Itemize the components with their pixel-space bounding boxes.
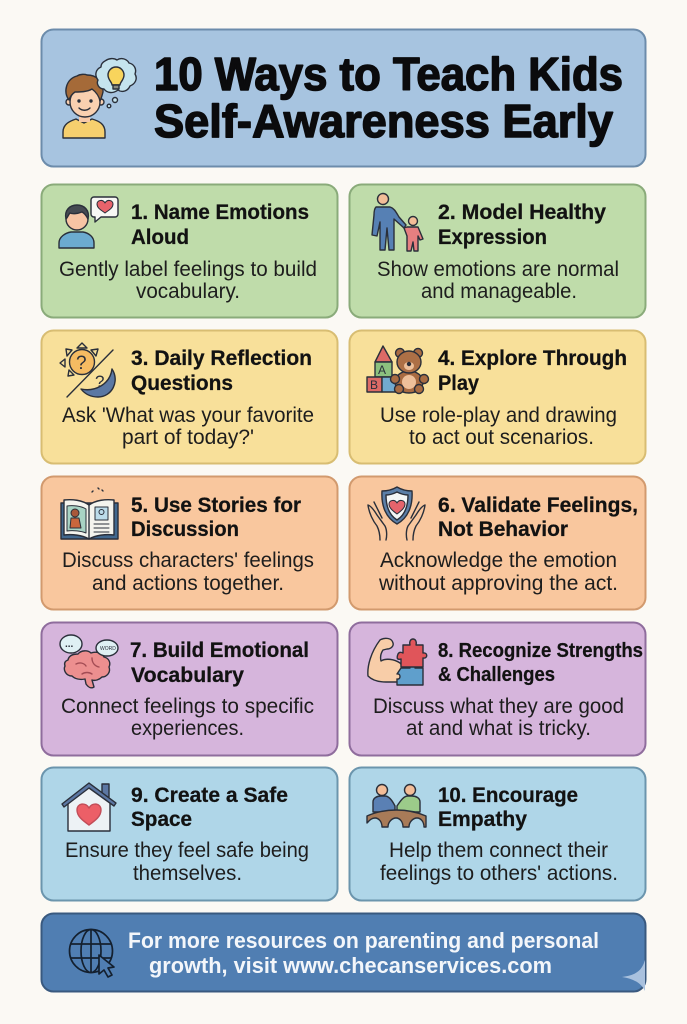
header banner — [42, 30, 646, 166]
heading — [438, 784, 578, 831]
description: without approving the act. — [378, 572, 618, 595]
icon: hands around a heart shield — [368, 487, 425, 540]
heading: Questions — [131, 372, 233, 395]
heading — [131, 784, 288, 831]
heading — [438, 347, 627, 395]
heading: Space — [131, 808, 192, 831]
description — [378, 549, 618, 595]
description: and manageable. — [421, 280, 577, 303]
heading — [438, 640, 643, 686]
heading: 5. Use Stories for — [131, 494, 301, 517]
heading: Play — [438, 372, 479, 395]
description: themselves. — [133, 862, 242, 885]
decorative sparkle — [622, 960, 645, 991]
icon: toy blocks and teddy bear: B — [370, 378, 378, 392]
description — [373, 695, 624, 740]
icon: toy blocks and teddy bear — [367, 346, 428, 394]
heading — [131, 494, 301, 541]
icon: sun and moon with question marks: ? — [76, 353, 87, 374]
footer text — [128, 928, 599, 978]
icon: open story book — [61, 488, 118, 539]
heading: 6. Validate Feelings, — [438, 494, 638, 517]
icon: two people on a bridge — [367, 784, 426, 827]
icon: toy blocks and teddy bear: A — [378, 363, 386, 377]
description: Help them connect their — [389, 839, 608, 862]
description: Gently label feelings to build — [59, 258, 317, 281]
card 3: Daily Reflection Questions — [42, 330, 338, 464]
card 10: Encourage Empathy — [350, 768, 646, 900]
description — [380, 404, 617, 449]
heading — [438, 494, 638, 541]
card 4: Explore Through Play — [350, 330, 646, 464]
heading: 1. Name Emotions — [131, 201, 309, 224]
heading: 4. Explore Through — [438, 347, 627, 370]
description — [61, 695, 314, 740]
description: vocabulary. — [136, 280, 240, 303]
heading — [130, 639, 309, 687]
title — [154, 48, 623, 147]
description — [380, 839, 618, 885]
description: Show emotions are normal — [377, 258, 619, 281]
description: to act out scenarios. — [409, 426, 594, 449]
heading: 7. Build Emotional — [130, 639, 309, 662]
footer banner — [42, 914, 646, 992]
description: Ensure they feel safe being — [65, 839, 309, 862]
heading: 3. Daily Reflection — [131, 347, 312, 370]
icon: sun and moon with question marks — [60, 343, 115, 397]
heading: 8. Recognize Strengths — [438, 640, 643, 662]
description: Acknowledge the emotion — [380, 549, 617, 572]
icon: brain with speech bubbles: ... — [65, 639, 74, 650]
heading: Not Behavior — [438, 518, 568, 541]
heading — [438, 201, 606, 249]
heading: Empathy — [438, 808, 527, 831]
icon: brain with speech bubbles — [60, 635, 118, 688]
icon: child thinking of a light bulb — [63, 59, 136, 138]
heading: Expression — [438, 226, 547, 249]
footer text: For more resources on parenting and personal — [128, 928, 599, 953]
heading: & Challenges — [438, 664, 555, 686]
icon: person with heart speech bubble — [59, 197, 118, 248]
description: at and what is tricky. — [406, 717, 591, 740]
card 8: Recognize Strengths & Challenges — [350, 622, 646, 756]
description — [62, 549, 314, 595]
card 5: Use Stories for Discussion — [42, 476, 338, 610]
icon: sun and moon with question marks: ? — [95, 372, 104, 391]
heading: Discussion — [131, 518, 239, 541]
description — [59, 258, 317, 303]
description: feelings to others' actions. — [380, 862, 618, 885]
description: Connect feelings to specific — [61, 695, 314, 718]
description: Discuss what they are good — [373, 695, 624, 718]
heading — [131, 201, 309, 249]
icon: house with heart — [62, 783, 116, 831]
heading: 9. Create a Safe — [131, 784, 288, 807]
card 7: Build Emotional Vocabulary — [42, 622, 338, 756]
card 1: Name Emotions Aloud — [42, 184, 338, 318]
heading: Aloud — [131, 226, 189, 249]
icon: globe with cursor — [70, 930, 114, 977]
icon: flexed arm with puzzle pieces — [368, 638, 427, 685]
description — [377, 258, 619, 303]
description: Discuss characters' feelings — [62, 549, 314, 572]
heading: Vocabulary — [131, 664, 244, 687]
description — [62, 404, 314, 449]
description: and actions together. — [92, 572, 284, 595]
description — [65, 839, 309, 885]
footer text: growth, visit www.checanservices.com — [149, 953, 552, 978]
icon: brain with speech bubbles: WORD — [100, 646, 116, 652]
card 6: Validate Feelings, Not Behavior — [350, 476, 646, 610]
title: Self-Awareness Early — [154, 95, 613, 147]
icon: adult holding child's hand — [372, 194, 423, 251]
card 9: Create a Safe Space — [42, 768, 338, 900]
title: 10 Ways to Teach Kids — [154, 48, 623, 100]
description: part of today?' — [122, 426, 254, 449]
card 2: Model Healthy Expression — [350, 184, 646, 318]
description: Ask 'What was your favorite — [62, 404, 314, 427]
heading: 2. Model Healthy — [438, 201, 606, 224]
heading — [131, 347, 312, 395]
description: experiences. — [131, 717, 244, 740]
description: Use role-play and drawing — [380, 404, 617, 427]
heading: 10. Encourage — [438, 784, 578, 807]
